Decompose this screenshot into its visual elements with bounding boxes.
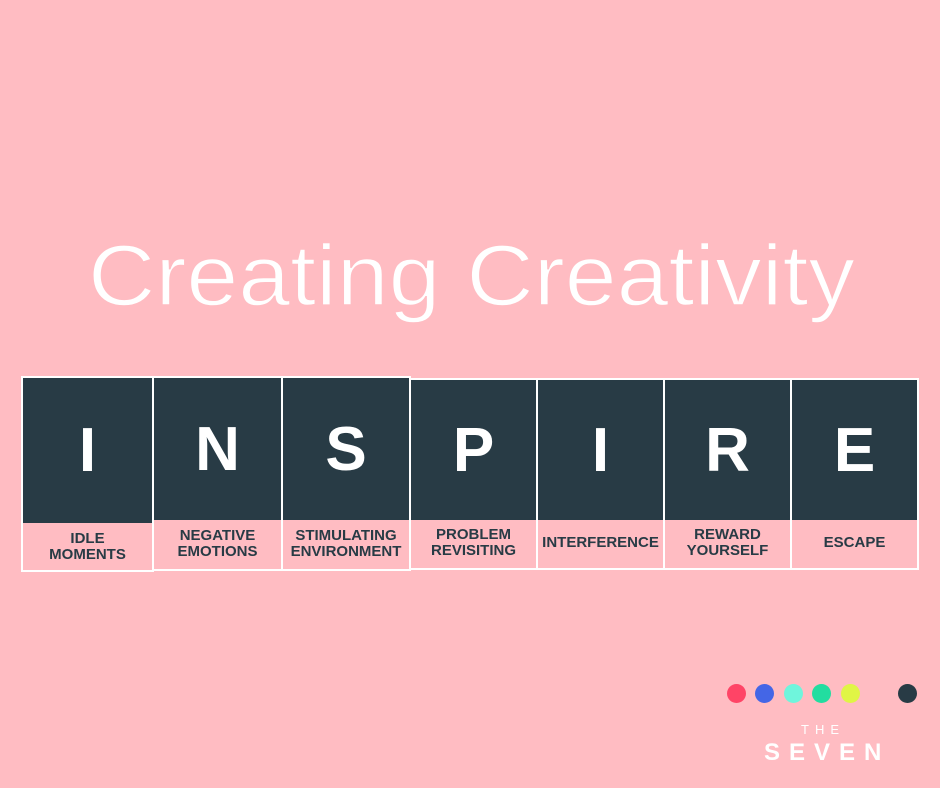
cell S stimulating environment: ENVIRONMENT bbox=[291, 542, 401, 560]
cell I idle moments: IDLE bbox=[70, 530, 105, 546]
cell E escape: ESCAPE bbox=[824, 534, 885, 551]
cell E escape bbox=[790, 378, 919, 570]
title: Creating Creativity bbox=[88, 228, 855, 324]
logo text: THE bbox=[801, 722, 845, 737]
cell I idle moments: I bbox=[79, 416, 96, 485]
cell I idle moments bbox=[21, 376, 154, 572]
cell N negative emotions: N bbox=[195, 414, 240, 484]
cell P problem revisiting: REVISITING bbox=[431, 542, 516, 559]
cell E escape: E bbox=[834, 416, 875, 484]
cell P problem revisiting: P bbox=[453, 416, 494, 484]
cell I interference: I bbox=[592, 416, 609, 484]
cell I interference bbox=[536, 378, 665, 570]
cell R reward yourself: YOURSELF bbox=[687, 542, 768, 559]
cell N negative emotions: EMOTIONS bbox=[177, 542, 258, 560]
cell S stimulating environment: S bbox=[325, 414, 367, 484]
cell R reward yourself: REWARD bbox=[694, 526, 761, 543]
cell S stimulating environment bbox=[281, 376, 411, 571]
cell N negative emotions bbox=[152, 376, 283, 571]
logo dots bbox=[727, 684, 917, 703]
logo text bbox=[764, 722, 890, 766]
cell P problem revisiting bbox=[409, 378, 538, 570]
cell I interference: INTERFERENCE bbox=[542, 534, 659, 551]
cell R reward yourself: R bbox=[705, 416, 750, 484]
cell P problem revisiting: PROBLEM bbox=[436, 526, 511, 543]
cell S stimulating environment: STIMULATING bbox=[295, 526, 397, 544]
cell N negative emotions: NEGATIVE bbox=[180, 526, 255, 544]
cell R reward yourself bbox=[663, 378, 792, 570]
cell I idle moments: MOMENTS bbox=[49, 546, 126, 562]
logo text: SEVEN bbox=[764, 739, 890, 766]
